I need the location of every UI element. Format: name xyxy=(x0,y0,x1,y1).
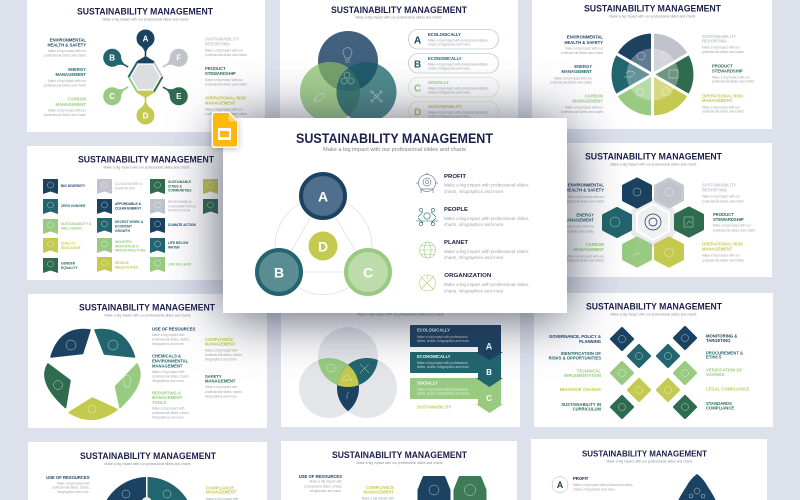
right labels: OPERATIONAL RISK xyxy=(702,94,743,98)
panel: slide segmented pie xyxy=(532,0,772,129)
right labels: MANAGEMENT xyxy=(702,246,733,252)
right labels: OPERATIONAL RISK xyxy=(205,96,246,100)
left labels: CARBON xyxy=(68,96,86,102)
item: organization: ORGANIZATION xyxy=(444,273,491,279)
option pills: B xyxy=(414,60,421,70)
arrow banners: slides, charts, infographics and more. xyxy=(417,339,470,343)
bookmark labels: ZERO HUNGER xyxy=(61,204,86,208)
right labels: PRODUCT xyxy=(205,66,226,71)
left labels: Make a big impact with our xyxy=(566,195,605,199)
arrow banners: Make a big impact with professional xyxy=(417,361,468,365)
panel: slide hexagon petals xyxy=(27,0,265,132)
column one text: infographics and more. xyxy=(152,379,185,383)
column two text xyxy=(205,337,243,398)
right labels: Make a big impact with our xyxy=(205,108,244,112)
arrow banners: C xyxy=(486,394,492,403)
arrow banners: ECOLOGICALLY xyxy=(417,328,450,332)
slide title: SUSTAINABILITY MANAGEMENT xyxy=(296,131,494,146)
right labels: LEGAL COMPLIANCE xyxy=(706,386,750,392)
right labels: professional slides and charts xyxy=(702,258,744,262)
bookmark labels: LIFE ON LAND xyxy=(168,262,192,266)
item: profit: Make a big impact with professional slides, xyxy=(444,182,529,188)
column one text: Make a big impact with xyxy=(152,370,185,374)
labels: infographics and more. xyxy=(57,490,90,494)
panel: centre featured slide xyxy=(223,118,567,313)
left labels: professional slides and charts xyxy=(44,84,86,88)
option pills: ECONOMICALLY xyxy=(428,56,462,61)
bookmark labels: WELL-BEING xyxy=(61,226,82,230)
left labels xyxy=(44,38,87,117)
right labels: professional slides and charts xyxy=(205,112,247,116)
bookmark labels: CLEAN WATER & xyxy=(115,182,143,186)
option pills xyxy=(408,30,498,121)
panel: slide hexagon cluster xyxy=(540,143,772,277)
column one text: professional slides, charts, xyxy=(152,338,190,342)
circle D: D xyxy=(318,238,328,254)
icon: compass xyxy=(420,275,436,291)
circle B: B xyxy=(274,264,284,280)
left labels: professional slides and charts xyxy=(550,80,592,84)
left labels: ENERGY xyxy=(574,64,592,69)
left labels: CURRICULUM xyxy=(573,406,601,412)
right labels: Make a big impact with our xyxy=(702,106,741,110)
circle C: C xyxy=(363,264,373,280)
left labels: professional slides and charts xyxy=(561,51,603,55)
panel: bottom centre slide xyxy=(281,441,517,500)
item: profit: charts, infographics and more. xyxy=(444,189,505,194)
column one text: infographics and more. xyxy=(152,342,185,346)
right labels: Make a big impact with our xyxy=(205,48,244,52)
arrow banners: slides, charts, infographics and more. xyxy=(417,365,470,369)
right labels xyxy=(702,34,754,114)
slide title: SUSTAINABILITY MANAGEMENT xyxy=(78,154,214,164)
slide subtitle: Make a big impact with our professional slides and charts xyxy=(611,312,697,316)
bookmark labels xyxy=(61,180,197,270)
slide title: SUSTAINABILITY MANAGEMENT xyxy=(585,152,722,162)
column one text: MANAGEMENT xyxy=(152,395,183,400)
diamond glyphs xyxy=(618,334,688,410)
bookmark labels: COMMUNITIES xyxy=(168,188,192,192)
arrow banners: ECONOMICALLY xyxy=(417,354,451,359)
right labels: ETHICS xyxy=(706,354,722,360)
left labels xyxy=(552,182,605,262)
item: planet xyxy=(420,240,529,260)
column one text: REPORTING & xyxy=(152,390,181,396)
slide title: SUSTAINABILITY MANAGEMENT xyxy=(331,5,467,15)
bookmark labels: INDUSTRY, xyxy=(115,240,133,244)
right labels: Make a big impact with our xyxy=(702,194,741,198)
slide subtitle: Make a big impact with our professional slides and charts xyxy=(323,147,467,153)
column two text: professional slides, charts, xyxy=(205,353,243,357)
bookmark labels: AFFORDABLE & xyxy=(115,202,142,206)
labels: USE OF RESOURCES xyxy=(299,474,342,479)
left labels: PLANNING xyxy=(579,339,601,344)
labels: MANAGEMENT xyxy=(206,490,237,494)
petal diagram: E xyxy=(176,92,182,101)
item: planet: charts, infographics and more. xyxy=(444,255,505,260)
labels: professional slides, charts, xyxy=(52,486,90,490)
right labels: COMPLIANCE xyxy=(706,406,734,410)
bookmark labels: SUSTAINABLE xyxy=(168,180,192,184)
left labels: MANAGEMENT xyxy=(573,98,603,104)
right labels xyxy=(205,36,247,116)
bookmark labels: EDUCATION xyxy=(61,246,81,250)
slide subtitle: Make a big impact with our professional slides and charts xyxy=(611,162,697,166)
slide title: SUSTAINABILITY MANAGEMENT xyxy=(584,4,721,14)
left labels: MANAGEMENT xyxy=(564,218,594,222)
panel: slide pentagon star xyxy=(28,294,267,428)
bookmark labels: QUALITY xyxy=(61,242,76,246)
slide subtitle: Make a big impact with our professional slides and charts xyxy=(610,14,696,18)
right labels: MONITORING & xyxy=(706,334,737,338)
item: planet: Make a big impact with professional slides, xyxy=(444,249,529,254)
item: people: charts, infographics and more. xyxy=(444,222,505,227)
left labels: TECHNICAL xyxy=(577,368,601,374)
column one text: Make a big impact with xyxy=(152,406,185,410)
column two text: MANAGEMENT xyxy=(205,342,236,346)
arrow banners: Make a big impact with professional xyxy=(417,335,468,339)
right labels: professional slides and charts xyxy=(712,80,754,84)
arrow banners: SOCIALLY xyxy=(417,380,438,386)
right labels: REPORTING xyxy=(702,38,727,44)
panel: slide venn and pills xyxy=(280,0,518,126)
arrow banners: B xyxy=(486,368,492,377)
labels: COMPLIANCE xyxy=(366,485,394,490)
option pills: charts, infographics and more. xyxy=(428,66,471,70)
left labels: Make a big impact with our xyxy=(48,79,87,83)
right labels: SAVINGS xyxy=(706,372,725,377)
right labels: professional slides and charts xyxy=(702,200,744,204)
column two text: SAFETY xyxy=(205,374,222,379)
petal diagram: F xyxy=(176,54,181,62)
left labels: Make a big impact with our xyxy=(566,254,605,258)
panel: bottom left slide xyxy=(28,442,267,500)
labels: MANAGEMENT xyxy=(364,490,394,494)
slide subtitle: Make a big impact with our professional slides and charts xyxy=(103,17,189,21)
right labels xyxy=(702,182,755,262)
arrow banners: Make a big impact with professional xyxy=(417,388,468,392)
right labels: professional slides and charts xyxy=(702,50,744,54)
segmented pie chart xyxy=(612,30,693,119)
bookmark labels: CLIMATE ACTION xyxy=(168,223,196,227)
column two text: Make a big impact with xyxy=(205,385,238,389)
left labels: CARBON xyxy=(586,242,604,247)
column two text: COMPLIANCE xyxy=(205,337,233,342)
icon: target person xyxy=(416,172,438,193)
right labels: PROCUREMENT & xyxy=(706,350,743,356)
left labels: Make a big impact with our xyxy=(565,106,604,110)
right labels: professional slides and charts xyxy=(205,53,247,57)
right labels: SUSTAINABILITY xyxy=(205,36,240,42)
labels: Make a big impact with xyxy=(57,482,90,486)
petal diagram: D xyxy=(143,111,149,120)
slide subtitle: Make a big impact with our professional slides and charts xyxy=(105,462,191,466)
slide title: SUSTAINABILITY MANAGEMENT xyxy=(80,451,216,461)
petal diagram: B xyxy=(109,54,115,62)
option pills: SOCIALLY xyxy=(428,80,449,85)
right labels: REPORTING xyxy=(205,42,230,46)
bookmark labels: DECENT WORK & xyxy=(115,220,144,224)
left labels: SUSTAINABILITY IN xyxy=(561,402,601,407)
left labels: GOVERNANCE, POLICY & xyxy=(549,334,601,339)
option pills: charts, infographics and more. xyxy=(428,42,471,46)
bookmark labels: ECONOMY xyxy=(115,224,133,228)
labels: Make a big impact with xyxy=(310,480,342,484)
arrow banners: SUSTAINABILITY xyxy=(417,404,452,410)
right labels: PRODUCT xyxy=(713,212,734,217)
right labels: STEWARDSHIP xyxy=(205,71,236,76)
column one text: ENVIRONMENTAL xyxy=(152,358,189,364)
slide subtitle: Make a big impact with our professional slides and charts xyxy=(105,313,191,317)
slide subtitle: Make a big impact with our professional slides and charts xyxy=(104,165,190,169)
slide subtitle: Make a big impact with our professional slides and charts xyxy=(358,312,444,316)
item: planet: PLANET xyxy=(444,240,469,246)
item: people: PEOPLE xyxy=(444,207,468,213)
bookmark grid xyxy=(43,179,218,273)
item: organization: charts, infographics and more. xyxy=(444,288,505,293)
bookmark labels: RESPONSIBLE xyxy=(168,200,192,204)
slide title: SUSTAINABILITY MANAGEMENT xyxy=(77,6,213,16)
left labels: IDENTIFICATION OF xyxy=(561,351,601,356)
labels: USE OF RESOURCES xyxy=(46,475,90,480)
arrow banners: A xyxy=(486,342,493,352)
right labels: Make a big impact with our xyxy=(702,46,741,50)
left labels: Make a big impact with our xyxy=(554,76,593,80)
connector ring xyxy=(275,196,372,294)
bookmark labels: SUSTAINABILITY & xyxy=(61,222,92,226)
left labels: professional slides and charts xyxy=(552,230,594,234)
slide subtitle: Make a big impact with our professional slides and charts xyxy=(607,459,693,463)
slide subtitle: Make a big impact with our professional slides and charts xyxy=(357,461,443,465)
left labels: ENERGY xyxy=(576,212,594,218)
left labels: ENVIRONMENTAL xyxy=(50,38,86,42)
item: organization: Make a big impact with professional slides, xyxy=(444,282,529,287)
left labels: Make a big impact with our xyxy=(565,46,604,50)
option pills: Make a big impact with professional slides, xyxy=(428,110,489,114)
right labels: TARGETING xyxy=(706,338,730,343)
option pills: D xyxy=(414,108,421,118)
petal diagram: C xyxy=(109,92,115,101)
profit text: Make a big impact with professional slides, xyxy=(573,483,634,487)
panel: slide goal bookmarks xyxy=(27,146,267,280)
right labels: MANAGEMENT xyxy=(205,100,236,106)
right labels: STEWARDSHIP xyxy=(712,68,743,74)
panel: slide diamond grid xyxy=(534,293,773,427)
bookmark labels: PRODUCTION xyxy=(168,208,191,212)
right labels: PRODUCT xyxy=(712,64,733,68)
bookmark labels: CLEAN ENERGY xyxy=(115,206,142,210)
icon: google slides badge xyxy=(212,112,238,148)
icon: globe xyxy=(420,242,436,258)
labels: infographics and more. xyxy=(310,489,342,493)
bookmark labels: WATER xyxy=(168,246,180,250)
right labels: Make a big impact with our xyxy=(712,76,751,80)
left labels: professional slides and charts xyxy=(44,54,86,58)
left labels: ENVIRONMENTAL xyxy=(567,34,603,40)
left labels: professional slides and charts xyxy=(562,258,604,262)
bookmark labels: CONSUMPTION & xyxy=(168,204,197,208)
bookmark labels: GROWTH xyxy=(115,229,131,233)
diamond icons xyxy=(612,328,696,418)
icon: people group xyxy=(416,208,438,226)
column one text: TOOLS xyxy=(152,400,167,405)
left labels: HEALTH & SAFETY xyxy=(564,40,603,45)
column one text: USE OF RESOURCES xyxy=(152,326,195,332)
venn diagram xyxy=(299,327,397,418)
column two text: infographics and more. xyxy=(205,394,238,398)
left labels: professional slides and charts xyxy=(562,200,604,204)
hexagon badges xyxy=(419,478,485,500)
arrow banners xyxy=(410,325,503,413)
bookmark labels: LIFE BELOW xyxy=(168,241,189,245)
letter badge xyxy=(552,476,568,492)
profit text: charts, infographics and more. xyxy=(573,488,616,492)
right labels: VERIFICATION OF xyxy=(706,368,743,372)
triangle circle diagram xyxy=(254,172,392,296)
left labels: MANAGEMENT xyxy=(56,72,86,77)
right labels xyxy=(706,334,750,410)
right labels: SUSTAINABILITY xyxy=(702,34,737,39)
left labels: BEHAVIOR CHANGE xyxy=(560,387,601,392)
slide title: SUSTAINABILITY MANAGEMENT xyxy=(582,448,708,458)
right labels: STANDARDS xyxy=(706,401,732,406)
column one text: Make a big impact with xyxy=(152,333,185,337)
partial circle chart xyxy=(104,477,190,500)
left labels: MANAGEMENT xyxy=(574,247,604,252)
shield shape xyxy=(677,474,717,500)
right labels: professional slides and charts xyxy=(702,110,744,114)
profit text xyxy=(573,476,634,492)
option pills: Make a big impact with professional slides, xyxy=(428,38,489,42)
bookmark labels: INEQUALITIES xyxy=(115,266,139,270)
bookmark labels: REDUCE xyxy=(115,261,130,265)
column one text: professional slides, charts, xyxy=(152,411,190,415)
right labels: OPERATIONAL RISK xyxy=(702,242,743,246)
bookmark labels: INNOVATION & xyxy=(115,244,139,248)
right labels: REPORTING xyxy=(702,188,727,192)
left labels: MANAGEMENT xyxy=(56,102,86,107)
left labels: Make a big impact with our xyxy=(48,108,87,112)
column two text: professional slides, charts, xyxy=(205,390,243,394)
option pills: Make a big impact with professional slides, xyxy=(428,86,489,90)
right labels: Make a big impact with our xyxy=(205,78,244,82)
circle A: A xyxy=(318,188,328,204)
petal diagram: A xyxy=(143,34,149,43)
labels xyxy=(46,475,239,500)
panel: slide venn with banners xyxy=(281,313,520,427)
option pills: SUSTAINABILITY xyxy=(428,104,463,109)
column two text: Make a big impact with xyxy=(205,348,238,352)
column two text: infographics and more. xyxy=(205,358,238,362)
option pills: charts, infographics and more. xyxy=(428,90,471,94)
venn diagram xyxy=(300,31,396,122)
option pills: ECOLOGICALLY xyxy=(428,32,461,37)
option pills: A xyxy=(414,36,421,46)
bookmark labels: GENDER xyxy=(61,262,76,266)
item: profit xyxy=(416,172,529,194)
left labels: HEALTH & SAFETY xyxy=(565,188,604,192)
right labels: Make a big impact with our xyxy=(702,254,741,258)
option pills: Make a big impact with professional slides, xyxy=(428,62,489,66)
pentagon star segments xyxy=(45,330,140,419)
column one text: professional slides, charts, xyxy=(152,374,190,378)
right labels: MANAGEMENT xyxy=(702,98,733,103)
left labels: CARBON xyxy=(585,94,603,98)
left labels: HEALTH & SAFETY xyxy=(47,42,86,48)
slide title: SUSTAINABILITY MANAGEMENT xyxy=(79,302,215,312)
slide title: SUSTAINABILITY MANAGEMENT xyxy=(586,302,722,312)
item: people xyxy=(416,207,529,227)
slide title: SUSTAINABILITY MANAGEMENT xyxy=(332,450,467,460)
right labels: professional slides and charts xyxy=(205,82,247,86)
labels: professional slides, charts, xyxy=(304,484,342,488)
right labels: STEWARDSHIP xyxy=(713,217,744,222)
petal diagram xyxy=(103,30,188,124)
left labels: professional slides and charts xyxy=(561,110,603,114)
bookmark labels: CITIES & xyxy=(168,184,183,188)
left labels: RISKS & OPPORTUNITIES xyxy=(549,356,601,360)
bookmark labels: EQUALITY xyxy=(61,266,78,270)
left labels: IMPLEMENTATION xyxy=(564,373,601,378)
panel: bottom right slide xyxy=(531,439,767,500)
left labels xyxy=(550,34,604,114)
left labels: Make a big impact with our xyxy=(48,49,87,53)
item: organization xyxy=(420,273,529,293)
left labels: Make a big impact with our xyxy=(556,224,595,228)
item: profit: PROFIT xyxy=(444,174,467,180)
slide subtitle: Make a big impact with our professional slides and charts xyxy=(356,16,442,20)
option pills: charts, infographics and more. xyxy=(428,114,471,118)
column one text xyxy=(152,326,195,420)
bookmark labels: INFRASTRUCTURE xyxy=(115,248,146,252)
column one text: MANAGEMENT xyxy=(152,364,183,368)
left labels: ENERGY xyxy=(68,67,86,72)
profit text: PROFIT xyxy=(573,476,589,481)
arrow banners: slides, charts, infographics and more. xyxy=(417,392,470,396)
left labels xyxy=(549,334,601,412)
column one text: CHEMICALS & xyxy=(152,354,181,358)
item: people: Make a big impact with professional slides, xyxy=(444,216,529,221)
option pills: C xyxy=(414,84,421,94)
right labels: professional slides and charts xyxy=(713,228,755,232)
left labels: professional slides and charts xyxy=(44,113,86,117)
hexagon cluster xyxy=(604,179,702,266)
labels xyxy=(299,474,394,500)
column one text: infographics and more. xyxy=(152,416,185,420)
bookmark labels: BIO DIVERSITY xyxy=(61,184,86,188)
labels: COMPLIANCE xyxy=(206,486,234,490)
right labels: SUSTAINABILITY xyxy=(702,182,737,188)
column two text: MANAGEMENT xyxy=(205,378,236,384)
letter badge: A xyxy=(557,480,564,490)
left labels: MANAGEMENT xyxy=(562,69,592,74)
bookmark labels: SANITATION xyxy=(115,186,135,190)
left labels: ENVIRONMENTAL xyxy=(568,182,604,188)
right labels: Make a big impact with our xyxy=(713,224,752,228)
